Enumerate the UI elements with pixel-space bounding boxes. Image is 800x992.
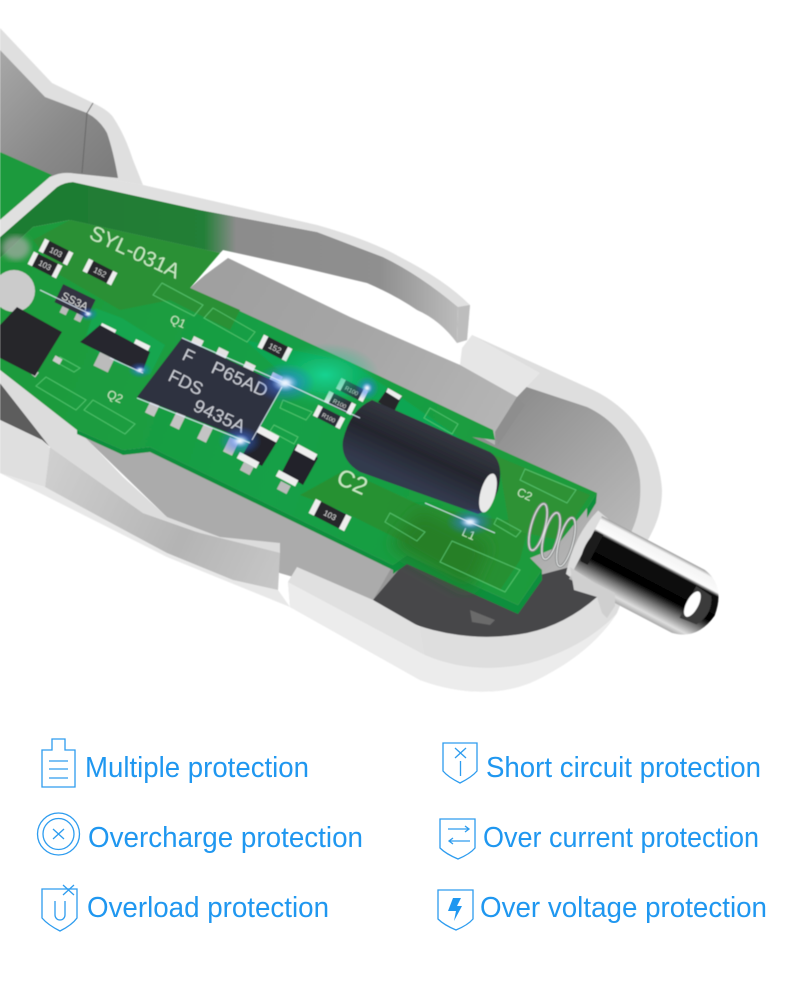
resistor 103 lower: 103: [322, 508, 338, 523]
resistor 103: 103: [37, 258, 53, 273]
label Q1: Q1: [168, 312, 188, 331]
item: Over current protection: Over current protection: [483, 822, 759, 854]
resistor 152: 152: [267, 341, 283, 356]
print outlines: [36, 283, 576, 592]
inner block: [190, 258, 517, 445]
main chip FDS9435A: F: [179, 345, 198, 367]
transistor: [80, 323, 150, 373]
left chunk: [0, 420, 50, 487]
lower-left dark pocket: [0, 383, 50, 447]
board silk labels: [86, 222, 535, 543]
main chip FDS9435A: [137, 336, 283, 456]
main chip FDS9435A: FDS: [165, 366, 206, 399]
small black chip beside main chip: [237, 426, 279, 475]
pin collar: [560, 508, 610, 582]
small black chip below: [276, 444, 318, 494]
resistor 152: [258, 334, 292, 362]
feature list: [38, 739, 767, 931]
item: Multiple protection: [42, 739, 309, 787]
label C2 small: C2: [515, 485, 535, 504]
icon: shield with U: [42, 885, 77, 931]
large square chip left: [0, 307, 62, 376]
item: Multiple protection: Multiple protection: [85, 752, 309, 784]
main chip FDS9435A: P65AD: [208, 357, 271, 401]
illustration: cut-away car charger: [0, 28, 733, 692]
icon: battery: [42, 739, 75, 787]
lid wall with green reflection: [0, 182, 458, 343]
resistor R100: [336, 378, 368, 402]
icon: shield with break: [443, 743, 477, 783]
lower shell clip over pin: [570, 567, 615, 618]
rear cap behind inductor: [378, 388, 402, 412]
item: Over voltage protection: [438, 890, 767, 930]
item: Overload protection: [42, 885, 329, 931]
item: Over voltage protection: Over voltage protection: [480, 892, 767, 924]
icon: shield with arrows: [440, 819, 475, 859]
diode SS3A: SS3A: [59, 290, 90, 314]
pin tip highlight: [681, 589, 704, 619]
resistor R100: R100: [320, 413, 336, 425]
resistor 103: 103: [48, 245, 64, 260]
inductor cylinder: [343, 400, 500, 514]
spring: [525, 502, 579, 568]
floor highlight: [470, 610, 495, 625]
item: Overcharge protection: [38, 813, 363, 855]
label Q2: Q2: [105, 387, 125, 406]
diode SS3A: [51, 284, 96, 324]
rear shell piece: [0, 28, 143, 220]
metal pin: [559, 508, 733, 647]
glowing lights: [40, 290, 495, 536]
lower shell outer: [288, 335, 662, 692]
item: Overcharge protection: Overcharge protection: [88, 822, 363, 854]
resistor 152: 152: [92, 265, 108, 280]
lid lower strip grey face: [45, 447, 280, 590]
resistor R100: R100: [331, 399, 347, 411]
label SYL-031A: SYL-031A: [86, 222, 184, 284]
lid lower strip bright band: [0, 370, 280, 553]
resistor 103: [28, 251, 62, 279]
lower shell lighter face: [288, 582, 617, 692]
label C2 large: C2: [333, 464, 372, 501]
label L1: L1: [460, 525, 478, 543]
resistor 103: [39, 238, 73, 266]
dark floor under board: [373, 560, 597, 637]
grey floor under board: [77, 430, 393, 600]
lower strip outer: [0, 473, 290, 607]
shell interior: [80, 288, 640, 633]
resistor 152: [83, 258, 117, 286]
circuit board side thickness: [393, 555, 542, 614]
item: Short circuit protection: Short circuit protection: [486, 752, 761, 784]
resistor R100: R100: [343, 386, 359, 398]
solder smudge: [2, 236, 30, 260]
item: Over current protection: [440, 819, 759, 859]
small SMD parts: [28, 238, 368, 531]
item: Overload protection: Overload protection: [87, 892, 329, 924]
resistor R100: [324, 391, 356, 415]
lower shell corner band: [288, 567, 425, 655]
item: Short circuit protection: [443, 743, 761, 784]
lower shell top-left corner face: [460, 335, 540, 397]
solder pad circle: [0, 270, 35, 312]
inner block side: [495, 397, 525, 445]
resistor 103 lower: [309, 499, 351, 531]
icon: shield with bolt: [438, 890, 473, 930]
pin tip dark end: [680, 586, 717, 628]
board print zones: [33, 220, 590, 590]
resistor R100: [313, 405, 345, 429]
main chip FDS9435A: 9435A: [190, 395, 249, 437]
lid rim: [0, 173, 470, 343]
icon: circled cross: [38, 813, 80, 855]
lid rim end face: [457, 305, 470, 343]
circuit board: [0, 220, 597, 605]
